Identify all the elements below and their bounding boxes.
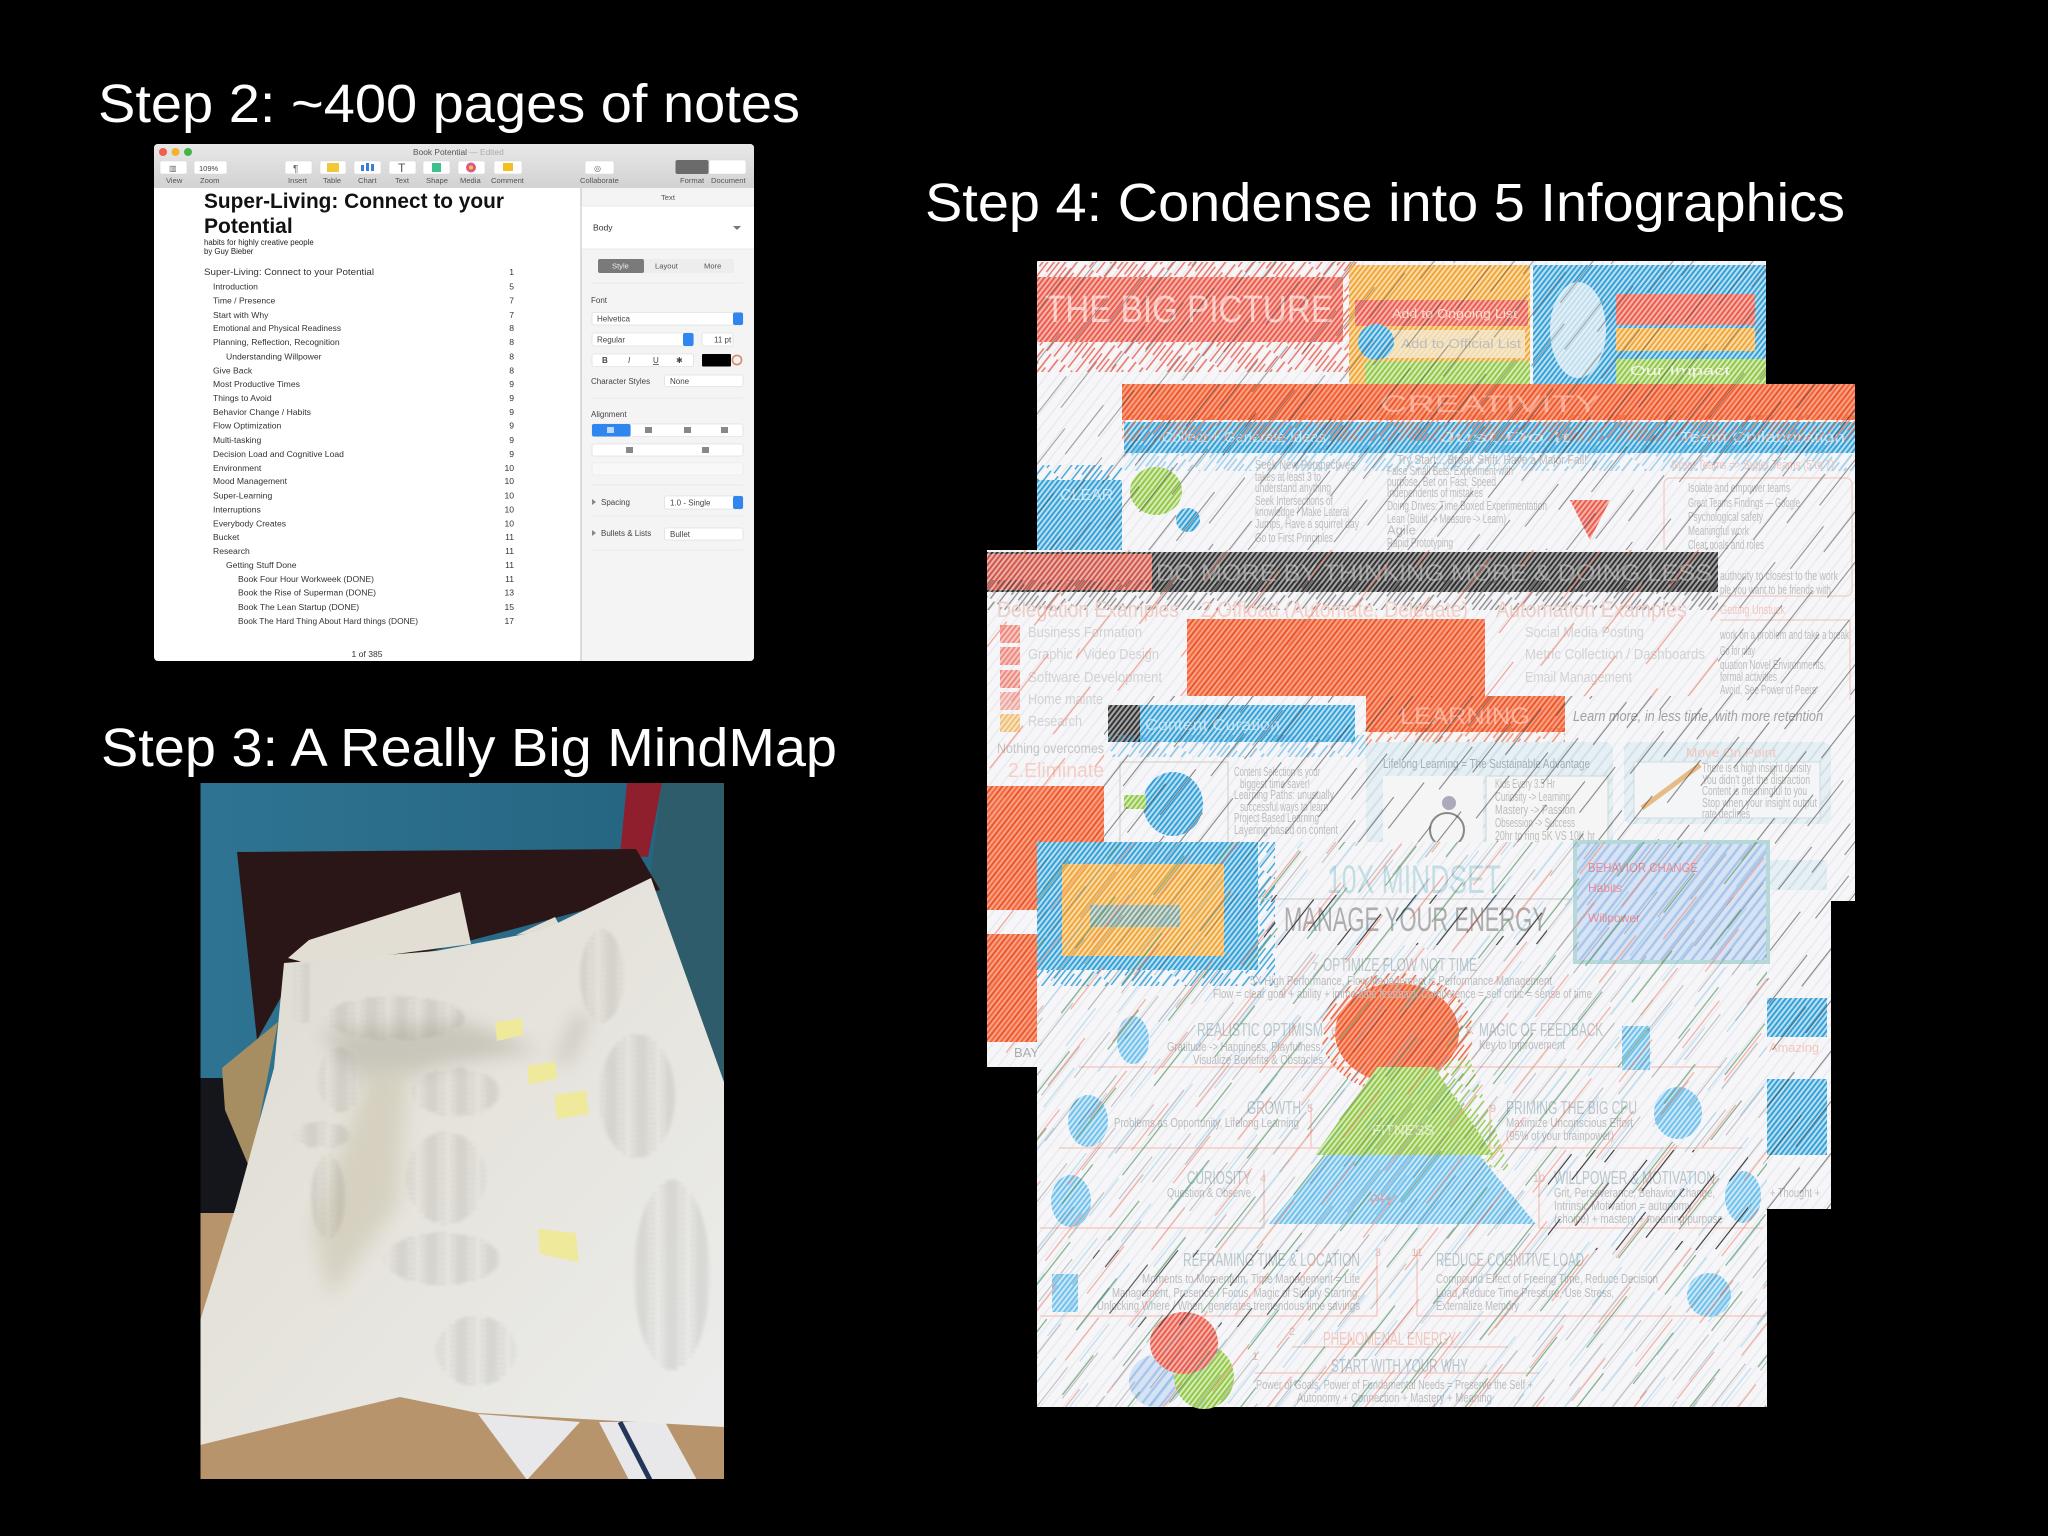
format sidebar: Bullet [670, 530, 691, 539]
section: willpower and motivation: Intrinsic Motivation = autonomy [1554, 1198, 1692, 1213]
pillow [288, 892, 562, 965]
column three: Avoid, See Power of Peers [1720, 682, 1816, 697]
automation examples: Social Media Posting [1525, 624, 1644, 641]
document page: table of contents: 11 [505, 546, 514, 556]
document page: table of contents: Time / Presence [213, 296, 275, 306]
lower left red block: 2.Eliminate [1008, 760, 1104, 782]
document page: table of contents: Decision Load and Cognitive Load [213, 449, 344, 459]
format sidebar: 1.0 - Single [670, 498, 711, 508]
document page: table of contents: Environment [213, 463, 262, 473]
document page: table of contents: Super-Learning [213, 491, 272, 501]
teal panel two: There is a high insight density [1702, 760, 1811, 775]
column two: Rapid Prototyping [1387, 535, 1453, 550]
blue action stack [1533, 265, 1766, 384]
document page: table of contents: 7 [509, 310, 514, 320]
panel: infographic card, learning [1104, 696, 1831, 1209]
section: willpower and motivation: (choice) + mastery + meaning/purpose [1554, 1211, 1723, 1226]
section: growth: GROWTH [1247, 1098, 1301, 1118]
column three: work on a problem and take a break [1719, 627, 1849, 642]
document page: table of contents: Potential [204, 215, 293, 238]
document page: table of contents: Book The Lean Startup (DONE) [238, 602, 359, 612]
dark banner: DO MORE BY THINKING MORE & DOING LESS [1156, 560, 1712, 587]
pyramid: PH [1370, 1192, 1391, 1209]
column three: Getting Unstuck [1720, 602, 1785, 617]
format sidebar: Style [612, 262, 629, 270]
document page: table of contents: 10 [504, 518, 514, 528]
format sidebar: Character Styles [591, 377, 650, 386]
format sidebar: Text [661, 193, 676, 202]
pyramid: FITNESS [1372, 1122, 1434, 1139]
document page: table of contents: 17 [504, 616, 514, 626]
red banner [1037, 277, 1343, 342]
numbered tags: 10 [1533, 1173, 1545, 1185]
document page: table of contents: 9 [509, 407, 514, 417]
toolbar: Insert [288, 176, 308, 185]
big orange block [1187, 619, 1485, 699]
bedside dark [200, 1078, 250, 1213]
teal panel one: Lifelong Learning = The Sustainable Advantage [1383, 756, 1590, 771]
large paper [200, 878, 724, 1445]
document page: table of contents: 10 [504, 505, 514, 515]
sparse scribble layer [1037, 842, 1767, 1407]
document page: table of contents: 11 [505, 560, 514, 570]
column three: authority to closest to the work [1720, 568, 1838, 583]
toolbar: Text [395, 176, 410, 185]
toolbar: Document [711, 176, 746, 185]
column one: understand anything [1255, 480, 1331, 495]
automation examples: Metric Collection / Dashboards [1525, 646, 1705, 663]
section: reframing time and location: Moments to Momentum, Time Management = Life [1142, 1271, 1360, 1286]
document page: table of contents: 8 [509, 366, 514, 376]
toolbar: Table [323, 176, 341, 185]
document page: table of contents: 9 [509, 379, 514, 389]
document page: table of contents: Give Back [213, 366, 253, 376]
column three: ple you want to be friends with [1720, 582, 1831, 597]
section: realistic optimism: Gratitude -> Happiness, Playfulness, [1167, 1039, 1323, 1054]
toolbar: Shape [426, 176, 448, 185]
document page: table of contents: Interruptions [213, 505, 261, 515]
section: willpower and motivation [1554, 1168, 1723, 1226]
delegation examples: Business Formation [1028, 624, 1142, 641]
document page: table of contents: 1 of 385 [351, 649, 383, 659]
title rule and section rules [1258, 898, 1570, 900]
document page: table of contents [204, 190, 514, 659]
automation examples [1496, 597, 1705, 686]
section: priming the big cpu: Maximize Unconscious Effort [1506, 1115, 1633, 1130]
document page: table of contents: Start with Why [213, 310, 269, 320]
top right picture: BEHAVIOR CHANGE [1588, 860, 1698, 875]
teal panel two: Stop when your insight output [1702, 795, 1817, 810]
orange action stack: Add to Ongoing List [1392, 306, 1517, 321]
format sidebar: Layout [655, 262, 679, 270]
section: reframing time and location: REFRAMING TIME & LOCATION [1183, 1250, 1360, 1270]
numbered tags: 11 [1411, 1247, 1423, 1259]
section: willpower and motivation: Grit, Perseverance, Behavior Change, [1554, 1185, 1715, 1200]
toolbar: Book Potential — Edited [413, 147, 504, 157]
teal panel one: Kids Every 3.5 Hr [1495, 776, 1555, 791]
toolbar: ▥ [169, 164, 177, 173]
drop chart and text: Content Selection is your [1234, 764, 1320, 779]
delegation examples [997, 597, 1179, 732]
document page: table of contents: 9 [509, 421, 514, 431]
format sidebar: 11 pt [714, 336, 732, 344]
format sidebar: I [628, 356, 631, 365]
teal panel two: Content is meaningful to you [1702, 783, 1807, 798]
document page: table of contents: 9 [509, 393, 514, 403]
tapestry [620, 783, 662, 857]
orange header [1122, 384, 1855, 441]
document page: table of contents: Planning, Reflection, Recognition [213, 337, 340, 347]
format sidebar: Helvetica [597, 314, 630, 324]
column three: quation Novel Environments, [1720, 657, 1826, 672]
column three: Meaningful work [1688, 523, 1749, 538]
section: priming the big cpu: (95% of your brainpower) [1506, 1128, 1614, 1143]
delegation examples: Delegation Examples [997, 597, 1179, 622]
teal panel one: Mastery -> Passion [1495, 802, 1575, 817]
orange header: CREATIVITY [1380, 391, 1600, 418]
panel: infographic card, the big picture [1037, 261, 1766, 556]
toolbar [154, 144, 754, 188]
section: reduce cognitive load: Compound Effect of Freeing Time, Reduce Decision [1436, 1271, 1658, 1286]
format sidebar: B [602, 356, 608, 365]
teal panel two: You didn't get the distraction [1702, 772, 1810, 787]
photo: mind map printout on a bed [200, 783, 724, 1480]
document page: table of contents: 10 [504, 463, 514, 473]
format sidebar: Regular [597, 336, 625, 344]
document page: table of contents: Behavior Change / Habits [213, 407, 311, 417]
document page: table of contents: Book the Rise of Superman (DONE) [238, 588, 376, 598]
toolbar: T [398, 161, 406, 175]
teal panel one [1366, 742, 1613, 850]
sticky notes [495, 1018, 589, 1262]
column two [1387, 452, 1610, 550]
column two: Lean (Build -> Measure -> Learn) [1387, 511, 1506, 526]
column one: takes at least 3 to [1255, 469, 1321, 484]
left blue block [1037, 465, 1122, 550]
column two: Independents of mistakes [1387, 485, 1483, 500]
column two: False Small Bets: Experiment with [1387, 463, 1513, 478]
section: growth [1114, 1098, 1301, 1130]
column two: Doing Drives: Time Boxed Experimentation [1387, 498, 1547, 513]
column three [1664, 457, 1852, 700]
document page: table of contents: by Guy Bieber [204, 247, 254, 256]
document page: table of contents: Flow Optimization [213, 421, 282, 431]
numbered tags: 9 [1490, 1103, 1496, 1115]
format sidebar: Bullets & Lists [601, 529, 651, 538]
top right picture: Habits [1588, 881, 1622, 895]
document page: table of contents: 11 [505, 574, 514, 584]
section: curiosity: CURIOSITY [1187, 1168, 1251, 1188]
column two: purpose, Bet on Fast, Speed [1387, 474, 1496, 489]
top right picture [1575, 842, 1768, 962]
right strip behind front card: Amazing [1769, 1040, 1819, 1055]
toolbar: ◎ [594, 164, 601, 173]
orange action stack: Add to Official List [1401, 336, 1521, 351]
toolbar: 109% [199, 164, 219, 173]
pyramid [1269, 973, 1536, 1224]
document page: table of contents: 1 [509, 267, 514, 277]
document page: table of contents: Mood Management [213, 476, 288, 486]
toolbar: Media [460, 176, 481, 185]
section: reframing time and location: Management, Presence / Focus, Magic of Simply Starting, [1112, 1285, 1360, 1300]
numbered tags: 5 [1307, 1103, 1313, 1115]
document page: table of contents: 5 [509, 282, 514, 292]
section: reduce cognitive load: Load, Reduce Time Pressure, Use Stress, [1436, 1285, 1614, 1300]
section: optimize flow [1213, 955, 1592, 1001]
teal panel two: rate declines [1702, 806, 1750, 821]
section: growth: Problems as Opportunity, Lifelong Learning [1114, 1115, 1299, 1130]
format sidebar: Font [591, 296, 608, 305]
blue header [1108, 705, 1368, 757]
panel: infographic card, do less [987, 550, 1718, 1067]
section: reframing time and location [1097, 1250, 1360, 1313]
left blue block: CLEAR [1060, 487, 1113, 504]
document page: table of contents: Everybody Creates [213, 518, 286, 528]
section: priming the big cpu: PRIMING THE BIG CPU [1506, 1098, 1637, 1118]
delegation examples: Graphic / Video Design [1028, 646, 1159, 663]
numbered tags: 2 [1289, 1326, 1295, 1338]
section: optimize flow: OPTIMIZE FLOW NOT TIME [1323, 955, 1477, 975]
topic icons [1051, 1016, 1761, 1317]
drop chart and text: biggest time saver! [1240, 776, 1310, 791]
document page: table of contents: Book The Hard Thing About Hard things (DONE) [238, 616, 418, 626]
title: step 2: Step 2: ~400 pages of notes [98, 74, 800, 134]
toolbar: Format [680, 176, 705, 185]
column one: Seek Intersections of [1255, 493, 1333, 508]
column three: Go for play [1720, 643, 1755, 658]
document page: table of contents: Multi-tasking [213, 435, 261, 445]
document page: table of contents: Most Productive Times [213, 379, 300, 389]
document page: table of contents: 9 [509, 449, 514, 459]
blue column headers: Team Collaboration [1680, 429, 1845, 446]
tan floor and bed [200, 1213, 724, 1480]
automation examples: Automation Examples [1496, 597, 1687, 622]
section: reduce cognitive load: Externalize Memory [1436, 1298, 1519, 1313]
section: start with your why: START WITH YOUR WHY [1331, 1356, 1468, 1376]
delegation examples: Home mainte [1028, 691, 1103, 708]
format sidebar: ✱ [676, 356, 683, 365]
document page: table of contents: habits for highly creative people [204, 238, 314, 247]
column three: Isolate and empower teams [1688, 480, 1790, 495]
delegation examples: Research [1028, 713, 1082, 730]
column one: Go to First Principles [1255, 530, 1333, 545]
section: reframing time and location: Unlocking Where / When, generates tremendous time savings [1097, 1298, 1360, 1313]
dark banner [987, 552, 1718, 610]
document page: table of contents: Bucket [213, 532, 240, 542]
section: realistic optimism: Visualize Benefits & Obstacles [1193, 1052, 1323, 1067]
teal panel one: 20hr to ring 5K VS 10K hr [1495, 828, 1595, 843]
document page: table of contents: 9 [509, 435, 514, 445]
toolbar: Collaborate [580, 176, 619, 185]
document page: table of contents: Emotional and Physical Readiness [213, 323, 341, 333]
lower left red block: BAY IN [1014, 1045, 1055, 1060]
teal panel two [1624, 742, 1831, 824]
document page: table of contents: 11 [505, 532, 514, 542]
red header: LEARNING [1400, 703, 1530, 730]
section: optimize flow: 5X High Performance, Flow Management is Performance Management [1250, 973, 1552, 988]
document page: table of contents: 10 [504, 491, 514, 501]
right strip behind front card [1767, 860, 1827, 1200]
format sidebar: Body [593, 222, 613, 232]
blue column headers: Just Do It [1440, 429, 1572, 446]
document page: table of contents: Understanding Willpower [226, 351, 322, 361]
column one [1130, 457, 1359, 545]
toolbar: Zoom [200, 176, 219, 185]
toolbar: View [166, 176, 183, 185]
top right picture: Willpower [1588, 911, 1640, 925]
section: start with your why [1256, 1356, 1533, 1405]
teal panel two: Move On Point [1686, 745, 1776, 760]
document page: table of contents: 8 [509, 337, 514, 347]
section: curiosity [1167, 1168, 1251, 1200]
column three: Psychological safety [1688, 509, 1763, 524]
title: 10x mindset: 10X MINDSET [1327, 858, 1501, 902]
column two: Try Start... Break Shift, Have a Major Fail! [1397, 452, 1587, 467]
blue column headers [1124, 422, 1855, 471]
numbered tags [1252, 961, 1545, 1363]
panel: infographic card, creativity columns [1122, 384, 1855, 901]
bottom loose papers [478, 1414, 697, 1480]
numbered tags: 6 [1331, 1026, 1337, 1038]
title: step 3: Step 3: A Really Big MindMap [101, 718, 837, 778]
format sidebar: None [670, 377, 690, 386]
section: willpower and motivation: WILLPOWER & MOTIVATION [1554, 1168, 1715, 1188]
section: realistic optimism [1167, 1020, 1323, 1067]
toolbar: Comment [491, 176, 525, 185]
document page: table of contents: Book Four Hour Workweek (DONE) [238, 574, 374, 584]
right strip behind front card: + Thought + [1770, 1185, 1820, 1200]
document page: table of contents: 7 [509, 296, 514, 306]
venn circles logo [1129, 1312, 1234, 1409]
teal panel one: Obsession -> Success [1495, 815, 1575, 830]
numbered tags: 1 [1252, 1351, 1258, 1363]
blue action stack: Our Impact [1630, 363, 1731, 378]
section: optimize flow: Flow = clear goal + ability + immediate feedback Competence = self critic = sense of time [1213, 986, 1592, 1001]
drop chart and text: Project Based Learning [1234, 810, 1319, 825]
document page: table of contents: 13 [504, 588, 514, 598]
blue header: Content Curation [1145, 717, 1280, 734]
drop chart and text: Learning Paths: unusually [1234, 787, 1334, 802]
column one: Seek New Perspectives [1255, 457, 1355, 472]
lower left red block [987, 740, 1104, 1060]
lower left red block: Nothing overcomes [997, 740, 1104, 756]
column two: Agile [1387, 522, 1416, 538]
title: step 4: Step 4: Condense into 5 Infographics [925, 173, 1845, 233]
section: magic of feedback [1479, 1020, 1603, 1052]
toolbar: ¶ [293, 164, 298, 175]
numbered tags: 4 [1260, 1173, 1266, 1185]
column three: formal activities [1720, 669, 1777, 684]
section: priming the big cpu [1506, 1098, 1637, 1143]
red header [1366, 696, 1565, 746]
format sidebar: More [704, 262, 721, 270]
column three: Great Teams => Super Teams (5 to 7) [1671, 457, 1834, 472]
format sidebar: Alignment [591, 410, 627, 419]
section: reduce cognitive load: REDUCE COGNITIVE LOAD [1436, 1250, 1584, 1270]
panel: pages document window screenshot [154, 144, 754, 661]
brown cloth [222, 1022, 278, 1169]
dark right wall [650, 783, 724, 1082]
section: magic of feedback: Key to Improvement [1479, 1037, 1565, 1052]
column one: knowledge / Make Lateral [1255, 504, 1349, 519]
column one: Jumps, Have a squirrel day [1255, 516, 1359, 531]
section: reduce cognitive load [1436, 1250, 1658, 1313]
automation examples: Email Management [1525, 669, 1633, 686]
format sidebar: Spacing [601, 498, 630, 507]
document page: table of contents: 8 [509, 323, 514, 333]
numbered tags: 8 [1466, 1025, 1472, 1037]
format sidebar: U [653, 356, 659, 365]
numbered tags: 7 [1312, 961, 1318, 973]
document page: table of contents: Super-Living: Connect to your Potential [204, 266, 374, 277]
section: start with your why: Power of Goals, Power of Fundamental Needs = Preserve the Self + [1256, 1377, 1533, 1392]
section: magic of feedback: MAGIC OF FEEDBACK [1479, 1020, 1603, 1040]
mind map text clusters [294, 930, 710, 1386]
numbered tags: 3 [1375, 1247, 1381, 1259]
section: phenomenal energy: PHENOMENAL ENERGY [1323, 1329, 1456, 1349]
headboard [237, 849, 660, 1040]
document page: table of contents: Research [213, 546, 250, 556]
teal panel one: Curiosity -> Learning [1495, 789, 1570, 804]
section: realistic optimism: REALISTIC OPTIMISM [1197, 1020, 1323, 1040]
format sidebar [581, 188, 754, 661]
tagline: Learn more, in less time, with more retention [1573, 708, 1823, 725]
document page: table of contents: 8 [509, 351, 514, 361]
document page: table of contents: Super-Living: Connect to your [204, 190, 504, 213]
paper shadows [313, 1013, 590, 1298]
document page: table of contents: Introduction [213, 282, 258, 292]
offload heading: 2.Offload (Automate, Delegate) [1201, 597, 1468, 622]
document page: table of contents: 15 [504, 602, 514, 612]
drop chart and text: successful ways to learn [1240, 799, 1328, 814]
column three: Great Teams Findings — Google [1688, 495, 1800, 510]
top left picture [1037, 842, 1258, 970]
column three: Clear goals and roles [1688, 537, 1764, 552]
blue column headers: Collect + Generate Ideas [1162, 429, 1326, 446]
delegation examples: Software Development [1028, 669, 1163, 686]
drop chart and text: Layering based on content [1234, 822, 1338, 837]
toolbar: Chart [358, 176, 377, 185]
section: start with your why: Autonomy + Connection + Mastery + Meaning [1297, 1390, 1492, 1405]
drop chart and text [1120, 762, 1338, 844]
document page: table of contents: Getting Stuff Done [226, 560, 297, 570]
document page: table of contents: 10 [504, 476, 514, 486]
panel: infographic card, 10x mindset [1037, 842, 1768, 1409]
orange action stack [1349, 265, 1530, 384]
section: curiosity: Question & Observe [1167, 1185, 1251, 1200]
title: manage your energy: MANAGE YOUR ENERGY [1284, 901, 1547, 939]
document page: table of contents: Things to Avoid [213, 393, 272, 403]
red banner: THE BIG PICTURE [1045, 289, 1333, 331]
